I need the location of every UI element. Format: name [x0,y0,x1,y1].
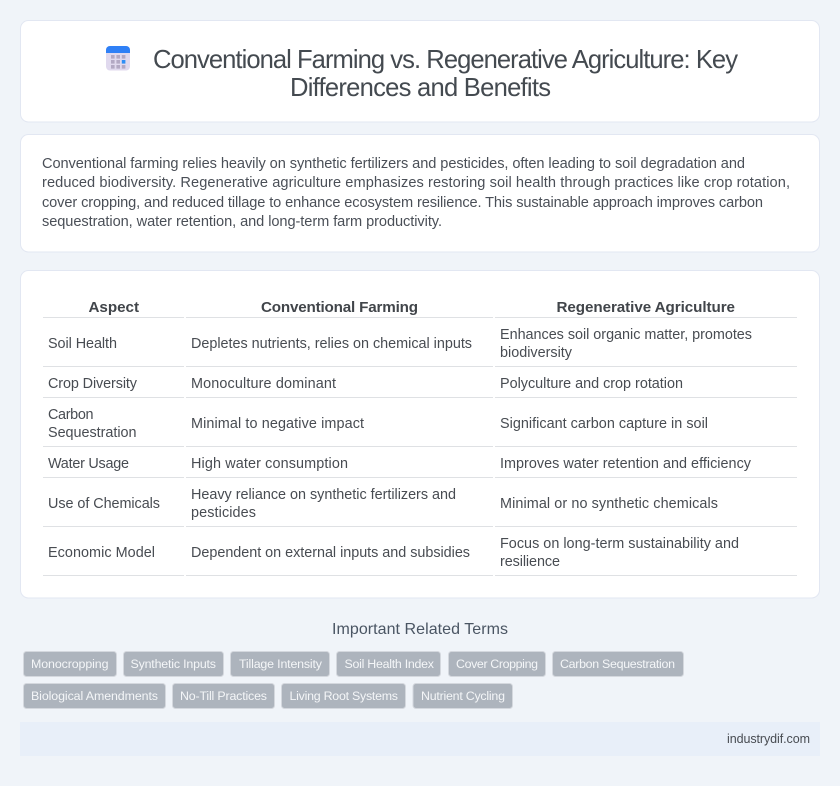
chip: Living Root Systems: Living Root Systems [290,689,398,703]
row: soil health: biodiversity [500,345,573,361]
text block: introduction: Conventional farming relies heavily on synthetic fertilizers and pesticides, often leading to soil degradation and [42,156,745,172]
table header: Conventional Farming [261,299,418,316]
row: soil health: Depletes nutrients, relies on chemical inputs [191,336,472,352]
row: crop diversity: Monoculture dominant [191,376,336,392]
row: economic model: Focus on long-term sustainability and [500,536,739,552]
title [153,46,738,102]
panel: title header [20,20,820,122]
row: use of chemicals: Minimal or no synthetic chemicals [500,496,718,512]
row: use of chemicals: Use of Chemicals [48,496,160,512]
title: Differences and Benefits [290,74,551,102]
chips: related terms [24,652,684,708]
table header: Regenerative Agriculture [556,299,735,316]
chip: Living Root Systems [282,684,406,708]
chip: Cover Cropping [448,652,546,676]
chip: Monocropping: Monocropping [31,657,109,671]
row: economic model [43,536,797,576]
chip: Soil Health Index: Soil Health Index [344,657,435,671]
row: crop diversity: Polyculture and crop rotation [500,376,683,392]
row: use of chemicals [43,487,797,527]
row: crop diversity [43,376,797,398]
chip: Soil Health Index [336,652,440,676]
title: Conventional Farming vs. Regenerative Agriculture: Key [153,46,738,74]
text block: introduction: reduced biodiversity. Regenerative agriculture emphasizes restoring soil health through practices like crop rotation, [42,175,790,191]
row: carbon sequestration: Minimal to negative impact [191,416,364,432]
chip: Synthetic Inputs: Synthetic Inputs [130,657,216,671]
chip: Biological Amendments: Biological Amendments [31,689,158,703]
row: water usage [43,456,797,478]
text block: introduction: cover cropping, and reduced tillage to enhance ecosystem resilience. This sustainable approach improves carbon [42,195,763,211]
chip: Nutrient Cycling: Nutrient Cycling [421,689,505,703]
footer: industrydif.com [727,732,810,746]
text block: introduction [42,156,790,230]
row: economic model: resilience [500,554,560,570]
row: carbon sequestration: Significant carbon capture in soil [500,416,708,432]
chip: Carbon Sequestration: Carbon Sequestration [560,657,675,671]
chip: Synthetic Inputs [124,652,224,676]
row: soil health: Enhances soil organic matter, promotes [500,327,752,343]
chip: Nutrient Cycling [413,684,512,708]
chip: Tillage Intensity [230,652,330,676]
panel: comparison table [20,270,820,598]
row: water usage: Improves water retention and efficiency [500,456,752,472]
row: soil health: Soil Health [48,336,117,352]
row: carbon sequestration: Carbon [48,407,94,423]
chip: Cover Cropping: Cover Cropping [456,657,538,671]
table header [43,299,797,318]
row: carbon sequestration [43,407,797,447]
row: use of chemicals: pesticides [191,505,256,521]
text block: introduction: sequestration, water retention, and long-term farm productivity. [42,214,442,230]
panel: introduction [20,134,820,252]
row: economic model: Economic Model [48,545,155,561]
chip: Monocropping [24,652,116,676]
chip: No-Till Practices [172,684,274,708]
heading: related terms: Important Related Terms [332,621,508,638]
row: soil health [43,327,797,367]
row: use of chemicals: Heavy reliance on synthetic fertilizers and [191,487,456,503]
row: carbon sequestration: Sequestration [48,425,136,441]
row: crop diversity: Crop Diversity [48,376,138,392]
chip: Carbon Sequestration [552,652,684,676]
chip: No-Till Practices: No-Till Practices [180,689,267,703]
chip: Tillage Intensity: Tillage Intensity [239,657,323,671]
row: water usage: High water consumption [191,456,348,472]
chip: Biological Amendments [24,684,166,708]
row: economic model: Dependent on external inputs and subsidies [191,545,470,561]
row: water usage: Water Usage [48,456,129,472]
footer [20,722,820,756]
icon: calendar [106,46,130,70]
table header: Aspect [88,299,139,316]
